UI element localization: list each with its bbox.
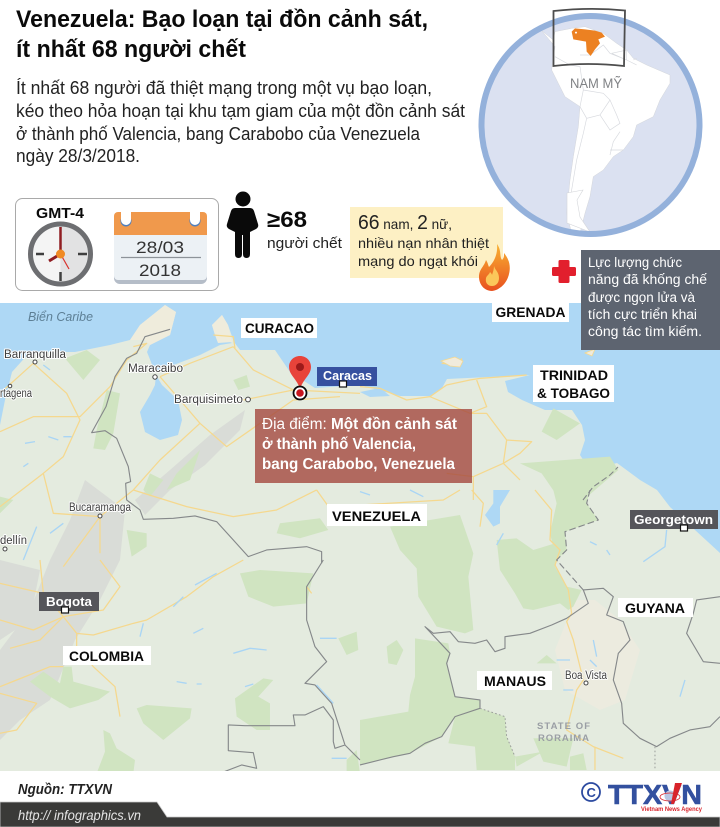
city labels: Maracaibo bbox=[128, 363, 183, 375]
label: Georgetown bbox=[630, 510, 718, 531]
death toll: người chết bbox=[267, 235, 343, 252]
logo: TTXVN: Vietnam News Agency bbox=[641, 806, 702, 813]
label: Caracas bbox=[317, 367, 377, 387]
label: Guyana: GUYANA bbox=[625, 600, 685, 616]
city labels: dellín bbox=[0, 535, 27, 547]
icon: calendar: 2018 bbox=[139, 261, 181, 280]
death toll bbox=[267, 207, 343, 252]
label: Manaus bbox=[477, 671, 552, 690]
mountains bbox=[0, 410, 245, 740]
death toll: ≥68 bbox=[267, 207, 307, 232]
icon: calendar: 28/03 bbox=[136, 238, 184, 257]
title bbox=[16, 6, 428, 63]
victims note: mạng do ngạt khói bbox=[358, 253, 478, 269]
footer bar bbox=[0, 802, 720, 827]
land bbox=[0, 305, 720, 771]
sea label: Biển Caribe: Biển Caribe bbox=[28, 309, 93, 324]
locator frame bbox=[554, 9, 625, 66]
rescue note bbox=[581, 250, 720, 350]
islands bbox=[441, 349, 595, 367]
location callout: bang Carabobo, Venezuela bbox=[262, 456, 455, 473]
footer bbox=[0, 771, 720, 827]
title: ít nhất 68 người chết bbox=[16, 36, 246, 63]
lake Maracaibo bbox=[140, 375, 182, 440]
label: Colombia: COLOMBIA bbox=[69, 648, 144, 664]
borders bbox=[92, 329, 322, 563]
copyright symbol bbox=[582, 783, 600, 801]
icon: fire bbox=[479, 244, 510, 291]
roads bbox=[0, 335, 360, 567]
rescue note: Lực lượng chức bbox=[588, 255, 682, 270]
title: Venezuela: Bạo loạn tại đồn cảnh sát, bbox=[16, 6, 428, 33]
copyright symbol: C bbox=[586, 785, 596, 800]
logo: TTXVN: TTXVN bbox=[608, 779, 702, 810]
location callout: Địa điểm: Một đồn cảnh sát bbox=[262, 416, 457, 433]
time and date card bbox=[16, 198, 218, 290]
location callout bbox=[255, 409, 472, 483]
rivers bbox=[360, 490, 685, 697]
label: GMT-4: GMT-4 bbox=[36, 205, 85, 222]
city labels: Bucaramanga bbox=[69, 502, 132, 514]
label: Bogota: Bogota bbox=[46, 595, 93, 609]
rescue note: tích cực triển khai bbox=[588, 307, 697, 322]
intro text: Ít nhất 68 người đã thiệt mạng trong một vụ bạo loạn, bbox=[16, 78, 432, 98]
label: Nam Mỹ: NAM MỸ bbox=[570, 75, 623, 91]
victims note bbox=[350, 207, 503, 278]
victims note: 66 nam, 2 nữ, bbox=[358, 212, 452, 234]
source: Nguồn: TTXVN bbox=[18, 781, 113, 798]
label: Venezuela bbox=[327, 504, 427, 526]
label: Trinidad and Tobago bbox=[533, 365, 614, 402]
victims note: nhiều nạn nhân thiệt bbox=[358, 235, 489, 251]
location callout: ở thành phố Valencia, bbox=[262, 436, 416, 453]
green areas bbox=[0, 350, 618, 773]
city labels: RORAIMA bbox=[538, 733, 589, 744]
city labels: Barranquilla bbox=[4, 349, 67, 361]
label: Georgetown: Georgetown bbox=[634, 513, 713, 527]
map bbox=[0, 303, 720, 773]
south america bbox=[542, 27, 670, 233]
rescue note: năng đã khống chế bbox=[588, 272, 707, 287]
icon: person bbox=[227, 192, 258, 258]
label: Manaus: MANAUS bbox=[484, 673, 546, 689]
label: Grenada: GRENADA bbox=[496, 304, 566, 320]
label: Guyana bbox=[618, 598, 693, 617]
icon: red cross bbox=[552, 260, 576, 283]
footer bar: http:// infographics.vn bbox=[18, 807, 141, 823]
rescue note: được ngọn lửa và bbox=[588, 290, 695, 305]
label: Trinidad and Tobago: & TOBAGO bbox=[537, 385, 610, 401]
city labels: STATE OF bbox=[537, 721, 590, 732]
icon: calendar bbox=[114, 212, 207, 284]
label: Caracas: Caracas bbox=[323, 369, 372, 383]
intro text: ở thành phố Valencia, bang Carabobo của Venezuela bbox=[16, 124, 421, 144]
intro text: ngày 28/3/2018. bbox=[16, 146, 140, 166]
venezuela bbox=[572, 28, 605, 56]
intro text: kéo theo hỏa hoạn tại khu tạm giam của một đồn cảnh sát bbox=[16, 101, 465, 121]
city labels: Boa Vista bbox=[565, 670, 608, 682]
locator globe bbox=[482, 9, 700, 234]
icon: clock bbox=[30, 224, 91, 284]
city labels: rtagena bbox=[0, 388, 32, 400]
rescue note: công tác tìm kiếm. bbox=[588, 324, 702, 339]
label: Trinidad and Tobago: TRINIDAD bbox=[540, 367, 608, 383]
city labels: Barquisimeto bbox=[174, 394, 243, 406]
icon: map pin bbox=[289, 356, 311, 400]
intro text bbox=[16, 78, 465, 166]
label: Venezuela: VENEZUELA bbox=[332, 508, 421, 524]
label: Curacao: CURACAO bbox=[245, 320, 314, 336]
city labels bbox=[0, 349, 608, 744]
label: Bogota bbox=[39, 592, 99, 613]
